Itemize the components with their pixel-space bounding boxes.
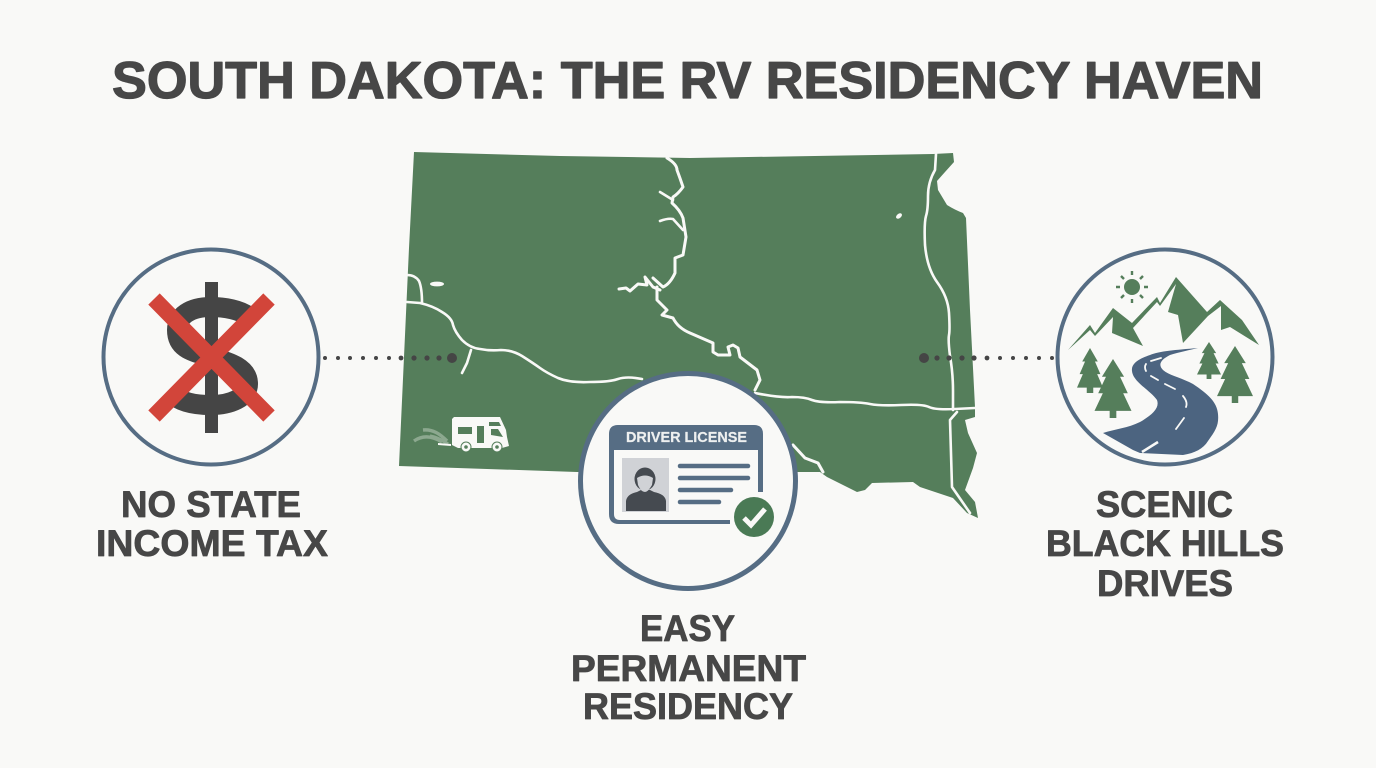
card outline xyxy=(609,425,763,524)
map: South Dakota xyxy=(399,152,978,518)
label: DRIVES xyxy=(1097,563,1233,604)
text lines xyxy=(680,466,748,502)
label: RESIDENCY xyxy=(583,686,793,727)
label xyxy=(571,608,806,727)
label: NO STATE xyxy=(121,484,301,525)
label: EASY xyxy=(640,608,735,649)
check badge xyxy=(734,497,774,537)
mountains xyxy=(1068,277,1259,350)
road xyxy=(1103,348,1218,455)
label xyxy=(96,484,328,564)
photo xyxy=(622,458,669,512)
label: INCOME TAX xyxy=(96,523,328,564)
panel: easy permanent residency xyxy=(571,374,806,727)
label: SCENIC xyxy=(1096,484,1233,525)
small lakes xyxy=(430,282,444,286)
panel: no state income tax xyxy=(96,250,328,564)
icon: RV xyxy=(414,417,509,452)
label: BLACK HILLS xyxy=(1046,523,1284,564)
icon: crossed-out dollar xyxy=(104,250,318,464)
icon: mountains and road xyxy=(1058,250,1272,464)
sun xyxy=(1116,271,1148,303)
dotted connector: tax to map xyxy=(323,353,457,363)
panel: scenic black hills drives xyxy=(1046,250,1284,604)
dotted connector: map to scenic drives xyxy=(919,353,1054,363)
label: PERMANENT xyxy=(571,648,806,689)
label xyxy=(1046,484,1284,604)
trees xyxy=(1077,342,1253,418)
icon: driver license xyxy=(580,374,796,588)
rivers and roads xyxy=(407,154,975,513)
state shape xyxy=(399,152,978,518)
title: SOUTH DAKOTA: THE RV RESIDENCY HAVEN xyxy=(112,52,1263,110)
card header text: DRIVER LICENSE xyxy=(626,430,747,446)
